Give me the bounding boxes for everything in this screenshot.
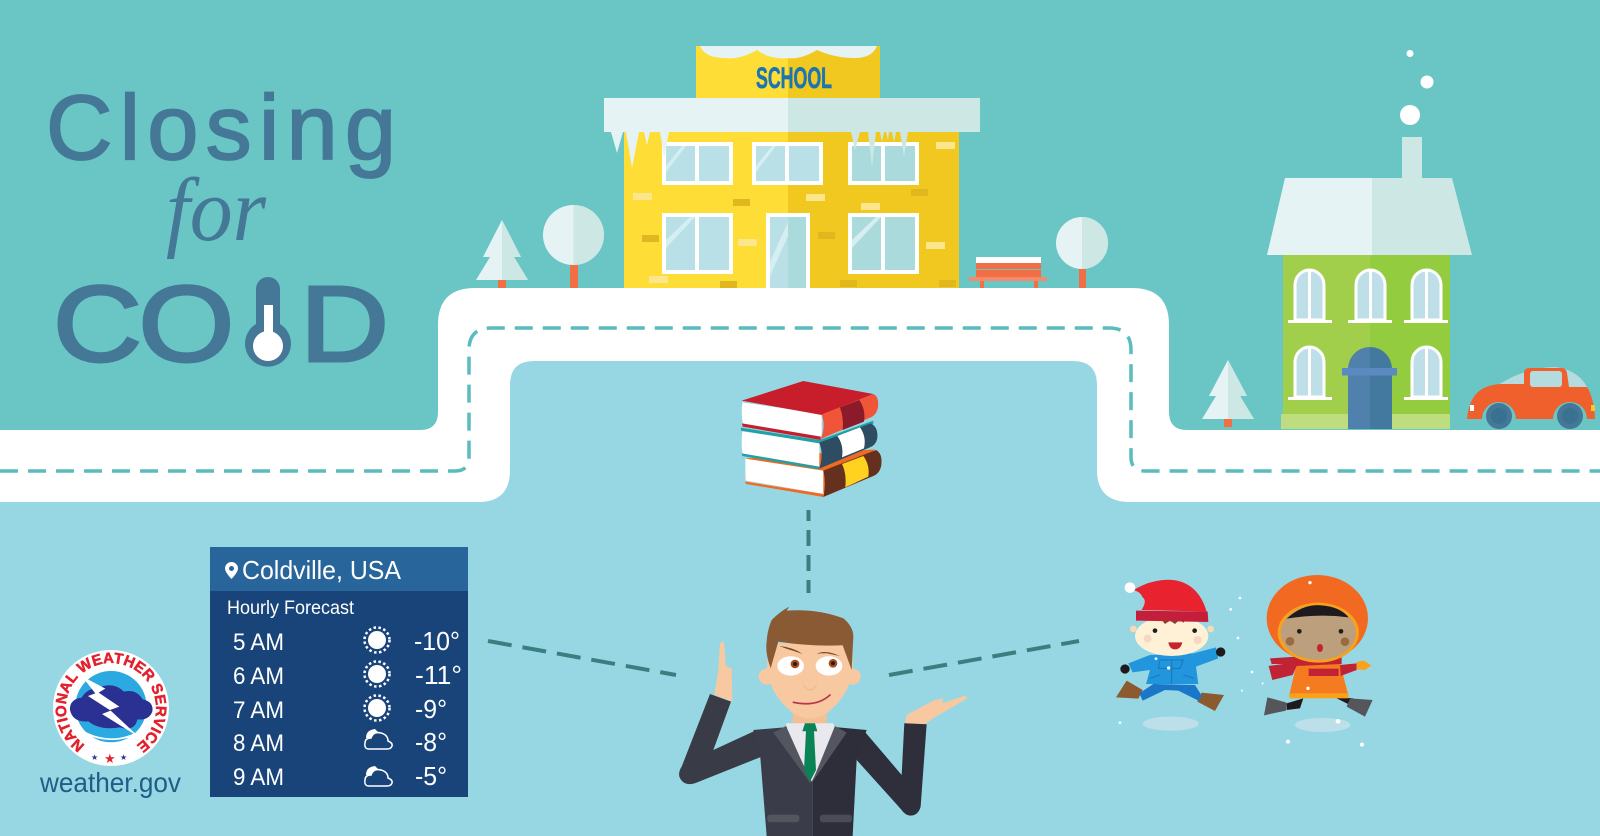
road: [0, 288, 1600, 502]
house: [1267, 50, 1472, 429]
logo stars: ★: [91, 753, 98, 762]
logo ring text: [66, 663, 156, 745]
suit arms: [679, 694, 927, 816]
school windows: [662, 142, 919, 274]
kids playing: [1116, 575, 1373, 747]
boy hair: [1161, 619, 1187, 624]
boy face: [1135, 616, 1208, 656]
icon: thermometer as letter L: [245, 277, 291, 367]
girl coat: [1289, 661, 1371, 698]
boy in red hat: [1116, 580, 1225, 731]
logo lettering: NATIONAL WEATHER SERVICE: [55, 652, 167, 754]
boy gloves: [1120, 647, 1225, 674]
bench: [969, 257, 1047, 288]
boy jacket: [1128, 647, 1218, 684]
chimney: [1402, 137, 1422, 179]
dashed line: kids to person: [889, 641, 1079, 675]
row: 9 AM: 9 AM: [233, 764, 284, 791]
chimney smoke: [1400, 50, 1434, 125]
book: middle: [741, 421, 877, 469]
left hand pointing up: [714, 642, 732, 702]
school sign: [696, 46, 880, 98]
title word: CO: CO: [53, 263, 234, 384]
title word: D: D: [300, 263, 389, 384]
background: ground inside road loop: [505, 355, 1102, 505]
school walls: [624, 132, 959, 288]
boy boots: [1116, 681, 1224, 711]
tree: round left of school: [543, 205, 604, 288]
book: bottom: [745, 449, 882, 497]
panel: hourly forecast: [210, 547, 468, 797]
boy cheeks and eyes: [1144, 628, 1202, 644]
girl legs: [1287, 697, 1353, 710]
house roof: [1267, 178, 1472, 255]
forecast body: [210, 547, 468, 797]
row: 7 AM: 7 AM: [233, 697, 284, 724]
row: 8 AM: [233, 727, 447, 757]
background: teal sky: [0, 0, 1600, 440]
girl scarf: [1269, 657, 1342, 680]
school building: [604, 46, 980, 288]
forecast subtitle: Hourly Forecast: [227, 598, 355, 619]
falling snow: [1119, 581, 1364, 747]
face: [767, 643, 853, 719]
nose: [803, 685, 817, 690]
girl hair: [1287, 605, 1349, 619]
row: 6 AM: [233, 660, 462, 690]
logo stars: ★: [104, 751, 116, 766]
girl in orange hood: [1264, 575, 1373, 732]
boy hat: [1125, 580, 1208, 622]
background: light blue ground: [0, 440, 1600, 836]
row: 9 AM: [233, 761, 447, 791]
neck: [793, 707, 827, 727]
snowy roof with icicles: [604, 98, 980, 168]
title: [46, 77, 396, 384]
right hand open: [905, 696, 967, 725]
car: [1467, 367, 1595, 429]
row: 5 AM: 5 AM: [233, 629, 284, 656]
suit jacket: [753, 725, 867, 836]
row: 8 AM: -8°: [415, 727, 447, 757]
dashed line: books to person: [806, 510, 810, 593]
forecast rows: [233, 626, 462, 791]
hair: [766, 607, 853, 670]
smile: [793, 695, 830, 704]
logo stars: [91, 751, 127, 766]
sign text: SCHOOL: [756, 62, 832, 95]
location name: Coldville, USA: [242, 555, 402, 585]
house walls: [1281, 255, 1450, 429]
website label: weather.gov: [39, 767, 181, 798]
title word: for: for: [166, 161, 267, 260]
logo disc: [53, 650, 169, 766]
boy jacket details: [1150, 660, 1194, 684]
person thinking: [679, 607, 967, 836]
row: 7 AM: -9°: [415, 694, 447, 724]
girl boots: [1264, 697, 1373, 717]
title word: Closing: Closing: [46, 77, 396, 179]
row: 5 AM: [233, 626, 460, 656]
tie: [802, 723, 817, 782]
tree: pine left of house: [1202, 360, 1254, 427]
forecast header: [210, 547, 468, 591]
row: 6 AM: 6 AM: [233, 663, 284, 690]
eyes and brows: [777, 646, 842, 676]
row: 5 AM: -10°: [414, 626, 460, 656]
row: 7 AM: [233, 694, 447, 724]
row: 9 AM: -5°: [415, 761, 447, 791]
girl cheeks and eyes: [1286, 629, 1349, 646]
boy shadow: [1143, 717, 1199, 731]
girl face: [1281, 605, 1356, 660]
girl shadow: [1295, 718, 1350, 732]
tree: round right of school: [1056, 217, 1108, 288]
icon: map pin: [225, 562, 238, 579]
girl mouth: [1317, 644, 1323, 652]
boy mouth: [1168, 642, 1182, 649]
logo: National Weather Service: [53, 650, 169, 766]
logo emblem: [70, 671, 153, 742]
shirt and lapels: [773, 723, 847, 783]
window sills: [1288, 320, 1448, 400]
school door: [766, 213, 810, 288]
house windows: [1295, 270, 1441, 397]
road centre dashes: [0, 328, 1600, 471]
book: top: [742, 381, 878, 440]
girl hood: [1267, 575, 1368, 662]
logo stars: ★: [120, 753, 127, 762]
dashed line: forecast to person: [488, 641, 676, 675]
icon: stack of books: [741, 381, 882, 497]
tree: pine left of school: [476, 220, 528, 288]
ears: [759, 669, 861, 685]
boy ears: [1130, 626, 1214, 632]
row: 6 AM: -11°: [415, 660, 462, 690]
boy trousers: [1139, 684, 1202, 701]
house door: [1342, 347, 1397, 429]
row: 8 AM: 8 AM: [233, 730, 284, 757]
